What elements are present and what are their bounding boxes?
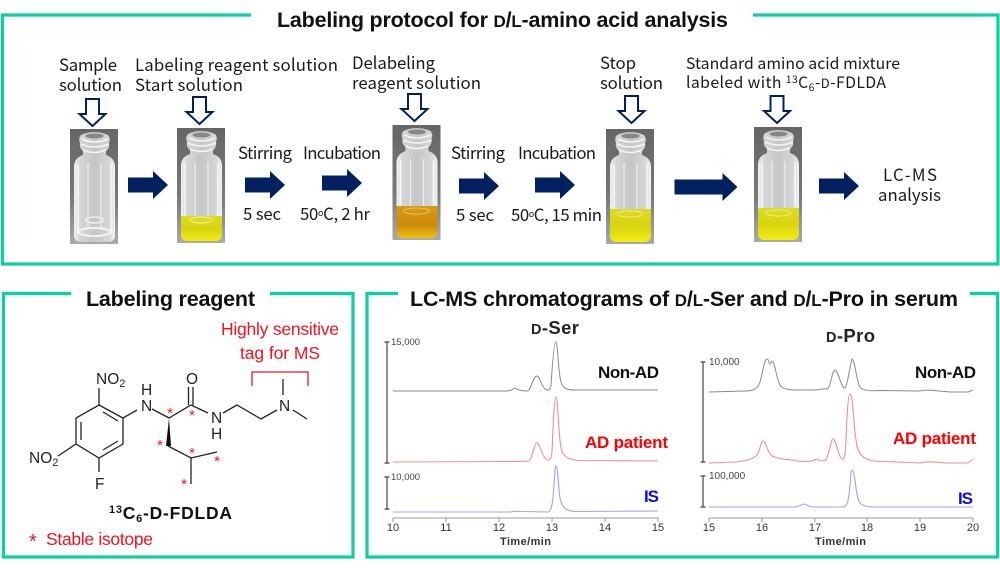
step label: standard amino acid mixture: D-FDLDA — [821, 70, 886, 93]
arrow: add stop solution — [618, 96, 644, 123]
step label: delabeling reagent solution — [352, 50, 481, 94]
condition: stirring 5 sec second: 5 sec — [456, 202, 494, 226]
label: highly sensitive tag: tag for MS — [240, 343, 320, 363]
x axis: 20 — [967, 522, 979, 534]
chart: D-Ser chromatogram: 10,000 — [391, 472, 420, 483]
step label: labeling reagent and start solution: Labeling reagent solution — [135, 52, 338, 76]
chart: D-Ser chromatogram: D-Ser — [531, 317, 579, 338]
compound name: 13 — [109, 504, 122, 516]
x axis: 15 — [652, 522, 664, 534]
arrow: add labeling reagent — [186, 97, 212, 124]
trace: IS — [393, 466, 658, 512]
label: highly sensitive tag — [221, 319, 339, 363]
arrow: add delabeling reagent — [402, 94, 428, 121]
chemical structure: F — [95, 476, 104, 493]
panel: labeling reagent — [4, 287, 353, 557]
x axis: 16 — [756, 522, 768, 534]
chart: D-Pro chromatogram: D-Pro — [826, 325, 875, 346]
chart: D-Pro chromatogram — [700, 325, 979, 548]
chart: D-Pro chromatogram: IS — [958, 489, 973, 508]
step label: stop solution: Stop — [600, 50, 636, 74]
step label: sample solution: Sample — [59, 52, 117, 76]
arrow: stop to standard — [674, 173, 738, 201]
x axis — [387, 518, 664, 548]
chart: D-Pro chromatogram: AD patient — [893, 429, 976, 448]
stable isotope marks: * — [167, 405, 173, 422]
stable isotope marks: * — [189, 445, 195, 462]
chemical structure: H — [211, 426, 222, 443]
x axis — [703, 518, 979, 548]
chart: D-Ser chromatogram: Non-AD — [598, 363, 659, 382]
label: LC-MS analysis: analysis — [878, 182, 941, 206]
title: labeling protocol: Labeling protocol for D/L-amino acid analysis — [277, 8, 728, 32]
step label: standard amino acid mixture: C — [798, 70, 808, 93]
stable isotope marks: * — [181, 476, 187, 493]
chemical structure: 2 — [52, 457, 58, 469]
panel: LC-MS chromatograms — [367, 287, 998, 557]
condition: incubation 50C 15 min: C, 15 min — [534, 202, 602, 226]
condition: incubation 50C 2 hr: 50 — [300, 201, 318, 225]
x axis: 17 — [809, 522, 821, 534]
condition: stirring 5 sec: 5 sec — [243, 201, 281, 225]
arrow: incubation — [322, 169, 362, 197]
chart: D-Ser chromatogram: IS — [644, 487, 659, 506]
trace: Non-AD — [709, 359, 973, 392]
chemical structure: 2 — [119, 378, 125, 390]
chart: D-Pro chromatogram: Non-AD — [915, 363, 976, 382]
x axis: 19 — [914, 522, 926, 534]
chart: D-Pro chromatogram: 100,000 — [709, 471, 746, 482]
condition: stirring 5 sec second: Stirring — [451, 140, 506, 164]
x axis: Time/min — [815, 536, 866, 548]
condition: incubation 50C 2 hr: o — [318, 206, 323, 219]
x axis: 14 — [599, 522, 611, 534]
heading: labeling reagent: Labeling reagent — [86, 287, 255, 311]
step label: sample solution: solution — [59, 72, 122, 96]
chart: D-Ser chromatogram — [384, 317, 668, 548]
chemical structure: N — [211, 410, 222, 427]
vial: standard mixture added, yellow — [754, 127, 802, 242]
compound name: C — [123, 503, 136, 523]
compound name: -D-FDLDA — [143, 503, 232, 523]
condition: incubation 50C 15 min: 50 — [511, 202, 529, 226]
chemical structure: NO — [29, 450, 52, 467]
compound name: 6 — [136, 513, 142, 525]
chemical structure: O — [186, 371, 198, 388]
condition: stirring 5 sec: Stirring — [238, 140, 293, 164]
vial: labeling reagent, yellow — [177, 128, 225, 243]
step label: standard amino acid mixture: labeled with — [686, 70, 781, 93]
stable isotope marks: * — [214, 453, 220, 470]
chart: D-Ser chromatogram: 15,000 — [391, 337, 420, 348]
legend: stable isotope: * — [29, 531, 37, 553]
stable isotope marks — [157, 405, 220, 493]
step label: sample solution — [59, 52, 122, 96]
label: highly sensitive tag: Highly sensitive — [221, 319, 339, 339]
condition: incubation 50C 2 hr: Incubation — [303, 140, 381, 164]
arrow: to LC-MS — [819, 172, 859, 200]
chemical structure: N — [141, 398, 152, 415]
chart: D-Pro chromatogram: 10,000 — [709, 357, 740, 368]
bracket: tag region — [252, 372, 308, 386]
stable isotope marks: * — [157, 437, 163, 454]
x axis: 11 — [440, 522, 452, 534]
condition: incubation 50C 15 min: Incubation — [518, 140, 596, 164]
chemical structure: H — [141, 382, 152, 399]
vial: stop solution, yellow — [606, 129, 654, 244]
stable isotope marks: * — [189, 407, 195, 424]
chart: D-Ser chromatogram: AD patient — [585, 433, 668, 452]
step label: stop solution: solution — [600, 70, 663, 94]
step label: stop solution — [600, 50, 663, 94]
step label: delabeling reagent solution: Delabeling — [352, 50, 436, 74]
vial: sample, empty — [70, 129, 118, 244]
arrow: stirring — [245, 171, 285, 199]
step label: labeling reagent and start solution — [135, 52, 338, 96]
condition: incubation 50C 15 min — [511, 140, 602, 226]
arrow: second stirring — [459, 172, 499, 200]
x axis: 10 — [387, 522, 399, 534]
x axis: 12 — [493, 522, 505, 534]
x axis: 15 — [703, 522, 715, 534]
chemical structure: NO — [96, 371, 119, 388]
x axis: 13 — [546, 522, 558, 534]
step label: standard amino acid mixture: - — [815, 70, 820, 93]
x axis: Time/min — [500, 536, 551, 548]
trace: AD patient — [393, 397, 658, 462]
condition: incubation 50C 2 hr: C, 2 hr — [323, 201, 370, 225]
heading: LC-MS chromatograms: LC-MS chromatograms of D/L-Ser and D/L-Pro in serum — [410, 287, 958, 311]
step label: labeling reagent and start solution: Start solution — [135, 72, 243, 96]
arrow: second incubation — [535, 171, 575, 199]
trace: IS — [709, 470, 973, 507]
x axis: 18 — [861, 522, 873, 534]
chemical structure — [29, 371, 307, 493]
label: LC-MS analysis — [878, 162, 941, 206]
arrow: sample to labeling — [128, 171, 168, 199]
step label: standard amino acid mixture: Standard amino acid mixture — [686, 51, 900, 74]
chemical structure: N — [279, 398, 290, 415]
legend: stable isotope: Stable isotope — [46, 529, 153, 549]
condition: incubation 50C 15 min: o — [529, 207, 534, 220]
vial: delabeling reagent, orange — [392, 125, 440, 240]
trace: AD patient — [709, 394, 973, 463]
label: LC-MS analysis: LC-MS — [883, 162, 937, 186]
arrow: add sample — [80, 99, 106, 126]
condition: stirring 5 sec second — [451, 140, 506, 226]
arrow: add standard mixture — [764, 96, 790, 123]
wedge bond — [166, 418, 171, 446]
step label: standard amino acid mixture: 6 — [809, 80, 815, 95]
step label: standard amino acid mixture: 13 — [786, 72, 798, 87]
condition: stirring 5 sec — [238, 140, 293, 225]
step label: standard amino acid mixture — [686, 51, 900, 95]
trace: Non-AD — [393, 342, 658, 391]
condition: incubation 50C 2 hr — [300, 140, 381, 225]
step label: delabeling reagent solution: reagent solution — [352, 70, 481, 94]
